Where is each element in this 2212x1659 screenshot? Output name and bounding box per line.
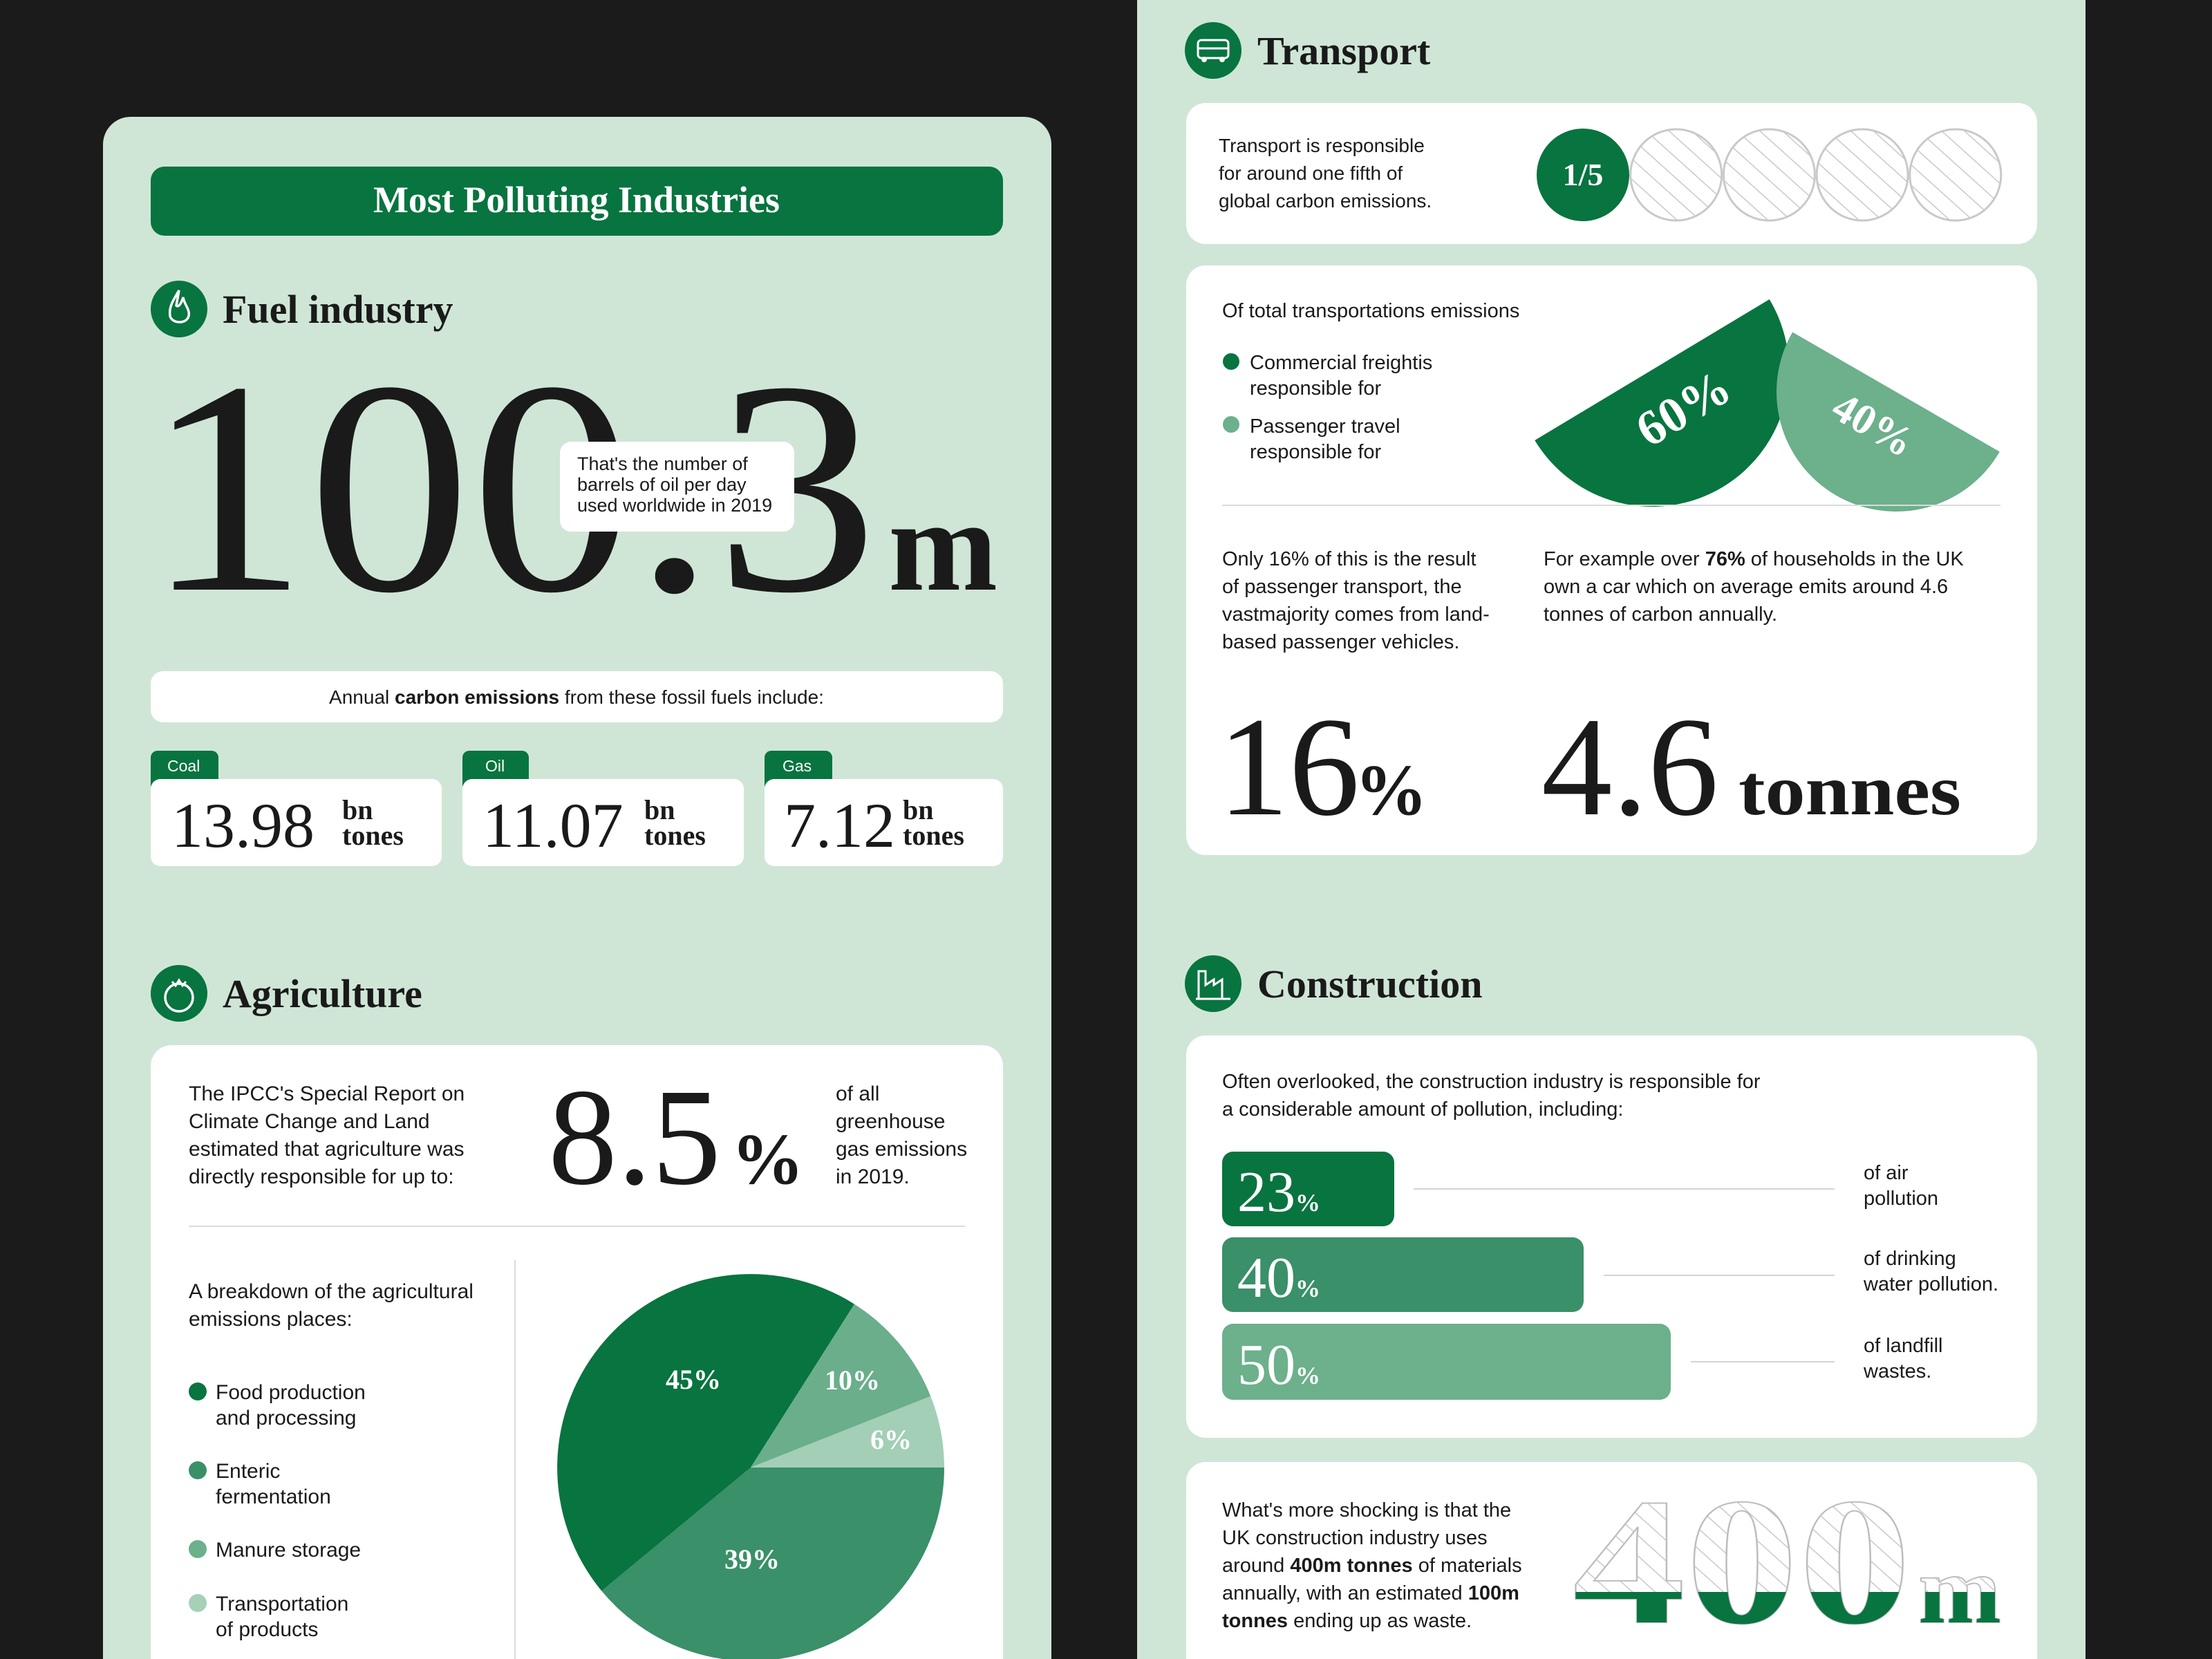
chart: half discs 60/40: 60%: [1627, 359, 1740, 458]
heading: construction: Construction: [1257, 962, 1482, 1006]
text block: of all greenhouse: greenhouse: [836, 1110, 945, 1133]
big number 400m: m: [1918, 1537, 2001, 1644]
card: oil: bn: [644, 794, 675, 825]
text block: 76% households: tonnes of carbon annually.: [1544, 603, 1777, 626]
title: [151, 167, 1003, 236]
text block: of all greenhouse: in 2019.: [836, 1165, 910, 1188]
icon: tomato: [151, 965, 207, 1022]
icon: factory: [1185, 955, 1241, 1012]
bar chart: construction: of landfill: [1864, 1335, 1942, 1357]
pie chart: agriculture: 45%: [666, 1364, 721, 1395]
chart: 1/5 circles: [1537, 129, 2001, 221]
big number 16%: 16: [1218, 688, 1360, 845]
card: gas: bn: [903, 794, 933, 825]
big number 8.5%: [548, 1061, 804, 1214]
legend: agriculture: of products: [216, 1618, 318, 1641]
card: 400m materials: annually, with an estimated 100m: [1222, 1582, 1519, 1604]
text block: 76% households: own a car which on average emits around 4.6: [1544, 576, 1948, 598]
card: coal: 13.98: [171, 790, 315, 861]
text block: 16% explanation: of passenger transport, the: [1222, 576, 1462, 598]
card: construction pollution: a considerable amount of pollution, including:: [1222, 1098, 1623, 1121]
chart: half discs 60/40: [1535, 299, 2000, 558]
card: 400m materials: around 400m tonnes of materials: [1222, 1555, 1522, 1577]
bar chart: construction: wastes.: [1863, 1360, 1931, 1382]
text block: IPCC: The IPCC's Special Report on: [189, 1082, 465, 1105]
big number 4.6 tonnes: 4.6: [1541, 688, 1718, 845]
heading: transport: Transport: [1257, 28, 1431, 73]
pie chart: agriculture: [557, 1274, 944, 1659]
card: 400m materials: [1186, 1461, 2037, 1659]
text block: IPCC: Climate Change and Land: [189, 1110, 430, 1133]
legend: transport: [1223, 352, 1432, 463]
text block: annual carbon emissions: [151, 671, 1003, 722]
pie chart: agriculture: 10%: [825, 1365, 880, 1396]
text block: 16% explanation: vastmajority comes from land-: [1222, 603, 1490, 626]
callout: barrels: [560, 442, 794, 532]
card: coal: [151, 751, 442, 866]
text block: breakdown: emissions places:: [189, 1308, 353, 1331]
text block: 16% explanation: Only 16% of this is the result: [1222, 548, 1477, 570]
bar chart: construction: of air: [1864, 1162, 1909, 1184]
text block: breakdown: A breakdown of the agricultural: [189, 1280, 474, 1303]
text block: IPCC: directly responsible for up to:: [189, 1165, 454, 1188]
card: oil: [462, 751, 744, 866]
card: coal: tones: [342, 820, 404, 851]
legend: agriculture: Enteric: [216, 1460, 280, 1483]
legend: agriculture: Transportation: [216, 1593, 348, 1615]
card: gas: 7.12: [784, 790, 895, 861]
card: one fifth: global carbon emissions.: [1219, 190, 1432, 212]
card: one fifth: [1186, 103, 2037, 244]
callout: barrels: barrels of oil per day: [577, 474, 747, 495]
card: oil: 11.07: [482, 790, 624, 861]
legend: transport: responsible for: [1250, 377, 1382, 400]
heading: agriculture: Agriculture: [223, 971, 422, 1016]
legend: transport: responsible for: [1250, 441, 1382, 463]
big number 400m: 400: [1573, 1461, 1911, 1659]
panel: left industries: [103, 117, 1051, 1659]
text block: of all greenhouse: of all: [836, 1082, 879, 1105]
card: 400m materials: tonnes ending up as waste.: [1222, 1610, 1472, 1632]
legend: agriculture: Manure storage: [216, 1539, 361, 1562]
bar chart: construction: 23%: [1237, 1160, 1320, 1224]
legend: transport: Commercial freightis: [1250, 352, 1432, 374]
text block: 76% households: For example over 76% of households in the UK: [1544, 548, 1964, 570]
icon: bus: [1185, 22, 1241, 79]
pie chart: agriculture: 6%: [870, 1424, 912, 1455]
big number 4.6 tonnes: [1541, 688, 1961, 845]
bar chart: construction: pollution: [1864, 1188, 1938, 1210]
card: one fifth: Transport is responsible: [1219, 135, 1425, 156]
big number 400m: m: [1918, 1537, 2001, 1644]
text block: annual carbon emissions: Annual carbon emissions from these fossil fuels include:: [329, 686, 824, 708]
big number 8.5%: %: [731, 1118, 804, 1199]
card: coal: Coal: [167, 757, 200, 775]
chart: half discs 60/40: 40%: [1824, 383, 1922, 467]
callout: barrels: used worldwide in 2019: [577, 495, 772, 516]
card: construction pollution: Often overlooked, the construction industry is responsible for: [1222, 1071, 1761, 1093]
card: construction pollution: [1186, 1035, 2037, 1438]
bar chart: construction: 40%: [1237, 1246, 1320, 1310]
bar chart: construction: [1222, 1152, 1998, 1400]
title: Most Polluting Industries: [373, 179, 780, 221]
panel: agriculture card: [151, 1045, 1003, 1659]
legend: agriculture: and processing: [216, 1407, 356, 1430]
big number 100.3m: m: [888, 474, 997, 619]
card: 400m materials: UK construction industry uses: [1222, 1527, 1488, 1549]
card: gas: [765, 751, 1003, 866]
legend: agriculture: Food production: [216, 1381, 366, 1404]
big number 16%: [1218, 688, 1427, 845]
legend: agriculture: [189, 1381, 366, 1641]
bar chart: construction: of drinking: [1864, 1248, 1956, 1270]
text block: IPCC: estimated that agriculture was: [189, 1138, 465, 1161]
big number 400m: [1575, 1501, 2000, 1624]
bar chart: construction: water pollution.: [1863, 1273, 1998, 1295]
big number 4.6 tonnes: tonnes: [1738, 751, 1961, 830]
card: gas: Gas: [782, 757, 812, 775]
callout: barrels: That's the number of: [577, 453, 748, 474]
big number 8.5%: 8.5: [548, 1061, 721, 1214]
card: 400m materials: What's more shocking is that the: [1222, 1499, 1511, 1521]
heading: fuel industry: Fuel industry: [223, 287, 453, 332]
chart: 1/5 circles: 1/5: [1563, 157, 1603, 192]
pie chart: agriculture: 39%: [724, 1544, 780, 1575]
big number 100.3m: 100.3: [145, 319, 878, 656]
big number 16%: %: [1355, 749, 1427, 830]
text block: 16% explanation: based passenger vehicles.: [1222, 631, 1459, 653]
card: transport split: Of total transportations emissions: [1222, 300, 1519, 322]
icon: flame: [151, 281, 207, 337]
card: coal: bn: [342, 794, 373, 825]
panel: right industries: [1137, 0, 2086, 1659]
card: transport split: [1186, 265, 2037, 855]
card: gas: tones: [903, 820, 964, 851]
legend: transport: Passenger travel: [1250, 415, 1400, 438]
card: oil: Oil: [485, 757, 505, 775]
card: oil: tones: [644, 820, 706, 851]
legend: agriculture: fermentation: [216, 1485, 331, 1508]
text block: of all greenhouse: gas emissions: [836, 1138, 967, 1161]
big number 400m: 400: [1573, 1461, 1911, 1659]
bar chart: construction: 50%: [1237, 1333, 1320, 1397]
card: one fifth: for around one fifth of: [1219, 162, 1403, 184]
